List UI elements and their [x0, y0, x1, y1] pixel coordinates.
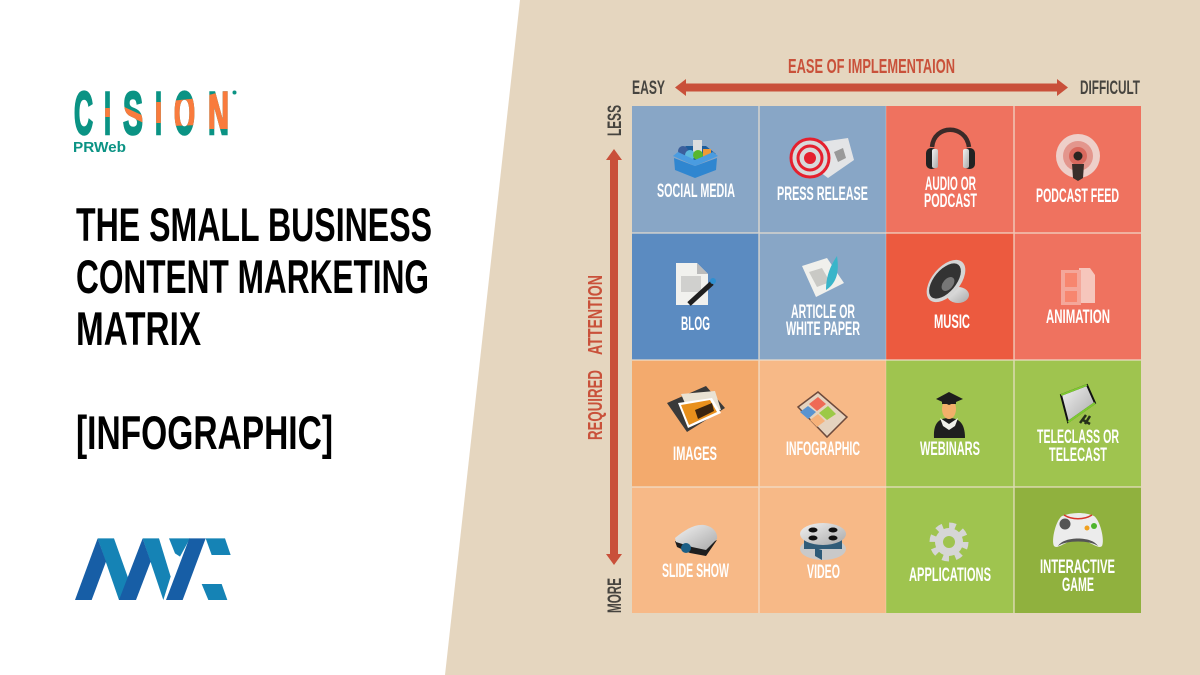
label: webinars: WEBINARS [920, 439, 980, 460]
label: article or white paper: ARTICLE OR [791, 302, 855, 323]
label: press release: PRESS RELEASE [777, 184, 868, 205]
y axis title: REQUIRED [585, 370, 607, 440]
label: interactive game: GAME [1062, 575, 1094, 596]
panel: infographic [786, 392, 860, 460]
icon: box of social media [673, 140, 718, 178]
logo: Cision PRWeb: I [104, 80, 111, 147]
panel: slide show [662, 525, 729, 582]
icon: gear [932, 526, 966, 558]
label: animation: ANIMATION [1046, 307, 1110, 328]
label: video: VIDEO [807, 562, 840, 583]
logo: Cision PRWeb: S [123, 80, 143, 147]
y axis title [585, 275, 607, 440]
icon: projector [675, 525, 717, 556]
label: slide show: SLIDE SHOW [662, 561, 729, 582]
logo: Cision PRWeb: I [155, 80, 162, 147]
y axis label: more: MORE [605, 578, 626, 613]
x axis title: EASE OF IMPLEMENTAION [788, 56, 955, 78]
panel: images [667, 386, 725, 465]
logo: Cision PRWeb: O [174, 80, 195, 147]
panel: audio or podcast [924, 130, 977, 212]
label: interactive game [1040, 557, 1115, 596]
label: social media: SOCIAL MEDIA [657, 181, 735, 202]
logo: MWC mark [75, 538, 231, 600]
title: MATRIX [76, 302, 201, 355]
icon: film reel [800, 523, 846, 560]
panel: blog [676, 263, 716, 335]
icon: paper and quill [802, 256, 844, 297]
matrix [632, 106, 1141, 613]
logo: Cision PRWeb: C [74, 80, 93, 147]
panel: teleclass or telecast [1037, 385, 1119, 466]
title: [INFOGRAPHIC] [76, 406, 333, 459]
panel: social media [657, 140, 735, 202]
panel: animation [1046, 268, 1110, 328]
icon: podcast [1056, 134, 1100, 181]
logo: Cision PRWeb: O [174, 80, 195, 147]
label: teleclass or telecast: TELECLASS OR [1037, 427, 1119, 448]
logo: Cision PRWeb: N [208, 80, 229, 147]
icon: speaker [919, 253, 973, 309]
panel: interactive game [1040, 513, 1115, 596]
x axis label: difficult: DIFFICULT [1080, 78, 1140, 99]
x axis label: easy: EASY [632, 78, 665, 99]
label: blog: BLOG [681, 314, 710, 335]
label: images: IMAGES [673, 444, 717, 465]
arrow: vertical double-headed [606, 149, 622, 565]
icon: headphones [926, 130, 975, 169]
logo: Cision PRWeb: N [208, 80, 229, 147]
y axis title: ATTENTION [585, 275, 607, 355]
panel: press release [777, 138, 868, 205]
icon: game controller [1053, 513, 1103, 547]
label: article or white paper [786, 302, 860, 340]
logo: Cision PRWeb [74, 90, 236, 152]
title: CONTENT MARKETING [76, 250, 429, 303]
panel: music [919, 253, 973, 333]
logo: Cision PRWeb: S [123, 80, 143, 147]
icon: photo stack [667, 386, 725, 432]
arrow: horizontal double-headed [675, 79, 1068, 96]
panel: video [800, 523, 846, 583]
logo: Cision PRWeb: PRWeb [73, 139, 126, 156]
logo: Cision PRWeb: I [104, 80, 111, 147]
label: infographic: INFOGRAPHIC [786, 439, 860, 460]
title: THE SMALL BUSINESS [76, 198, 432, 251]
icon: press release [791, 138, 854, 178]
label: applications: APPLICATIONS [909, 565, 991, 586]
icon: film document [1061, 268, 1095, 305]
title [76, 198, 432, 459]
y axis label: less: LESS [605, 105, 626, 136]
label: teleclass or telecast [1037, 427, 1119, 466]
label: article or white paper: WHITE PAPER [786, 319, 860, 340]
label: interactive game: INTERACTIVE [1040, 557, 1115, 578]
label: podcast feed: PODCAST FEED [1036, 186, 1119, 207]
label: music: MUSIC [934, 312, 970, 333]
icon: document and pen [676, 263, 716, 305]
panel: podcast feed [1036, 134, 1119, 207]
label: audio or podcast: AUDIO OR [925, 174, 976, 195]
icon: projection screen [1061, 385, 1095, 424]
tan background panel [445, 0, 1200, 675]
label: teleclass or telecast: TELECAST [1049, 445, 1107, 466]
panel: webinars [920, 392, 980, 460]
logo: Cision PRWeb: I [155, 80, 162, 147]
panel: article or white paper [786, 256, 860, 340]
label: audio or podcast [924, 174, 977, 212]
panel: applications [909, 526, 991, 586]
icon: graduate [934, 392, 965, 438]
icon: mini infographic [798, 392, 847, 437]
label: audio or podcast: PODCAST [924, 191, 977, 212]
